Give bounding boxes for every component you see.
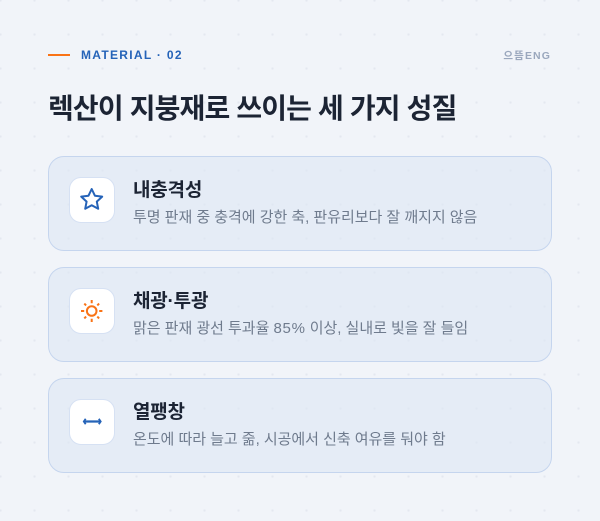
icon: sun xyxy=(69,288,115,334)
heading: 내충격성 xyxy=(133,180,202,201)
heading: 열팽창 xyxy=(133,402,185,423)
icon: expansion arrow xyxy=(69,399,115,445)
description: 온도에 따라 늘고 줆, 시공에서 신축 여유를 둬야 함 xyxy=(133,431,446,448)
accent dash xyxy=(48,54,70,56)
panel: thermal expansion xyxy=(48,378,552,473)
eyebrow label: MATERIAL · 02 xyxy=(81,48,183,62)
icon: star xyxy=(69,177,115,223)
description: 투명 판재 중 충격에 강한 축, 판유리보다 잘 깨지지 않음 xyxy=(133,209,477,226)
heading: 채광·투광 xyxy=(133,291,208,312)
description: 맑은 판재 광선 투과율 85% 이상, 실내로 빛을 잘 들임 xyxy=(133,320,468,337)
panel: daylighting xyxy=(48,267,552,362)
panel: impact resistance xyxy=(48,156,552,251)
brand label: 으뜸ENG xyxy=(503,50,551,62)
title: 렉산이 지붕재로 쓰이는 세 가지 성질 xyxy=(48,93,456,124)
